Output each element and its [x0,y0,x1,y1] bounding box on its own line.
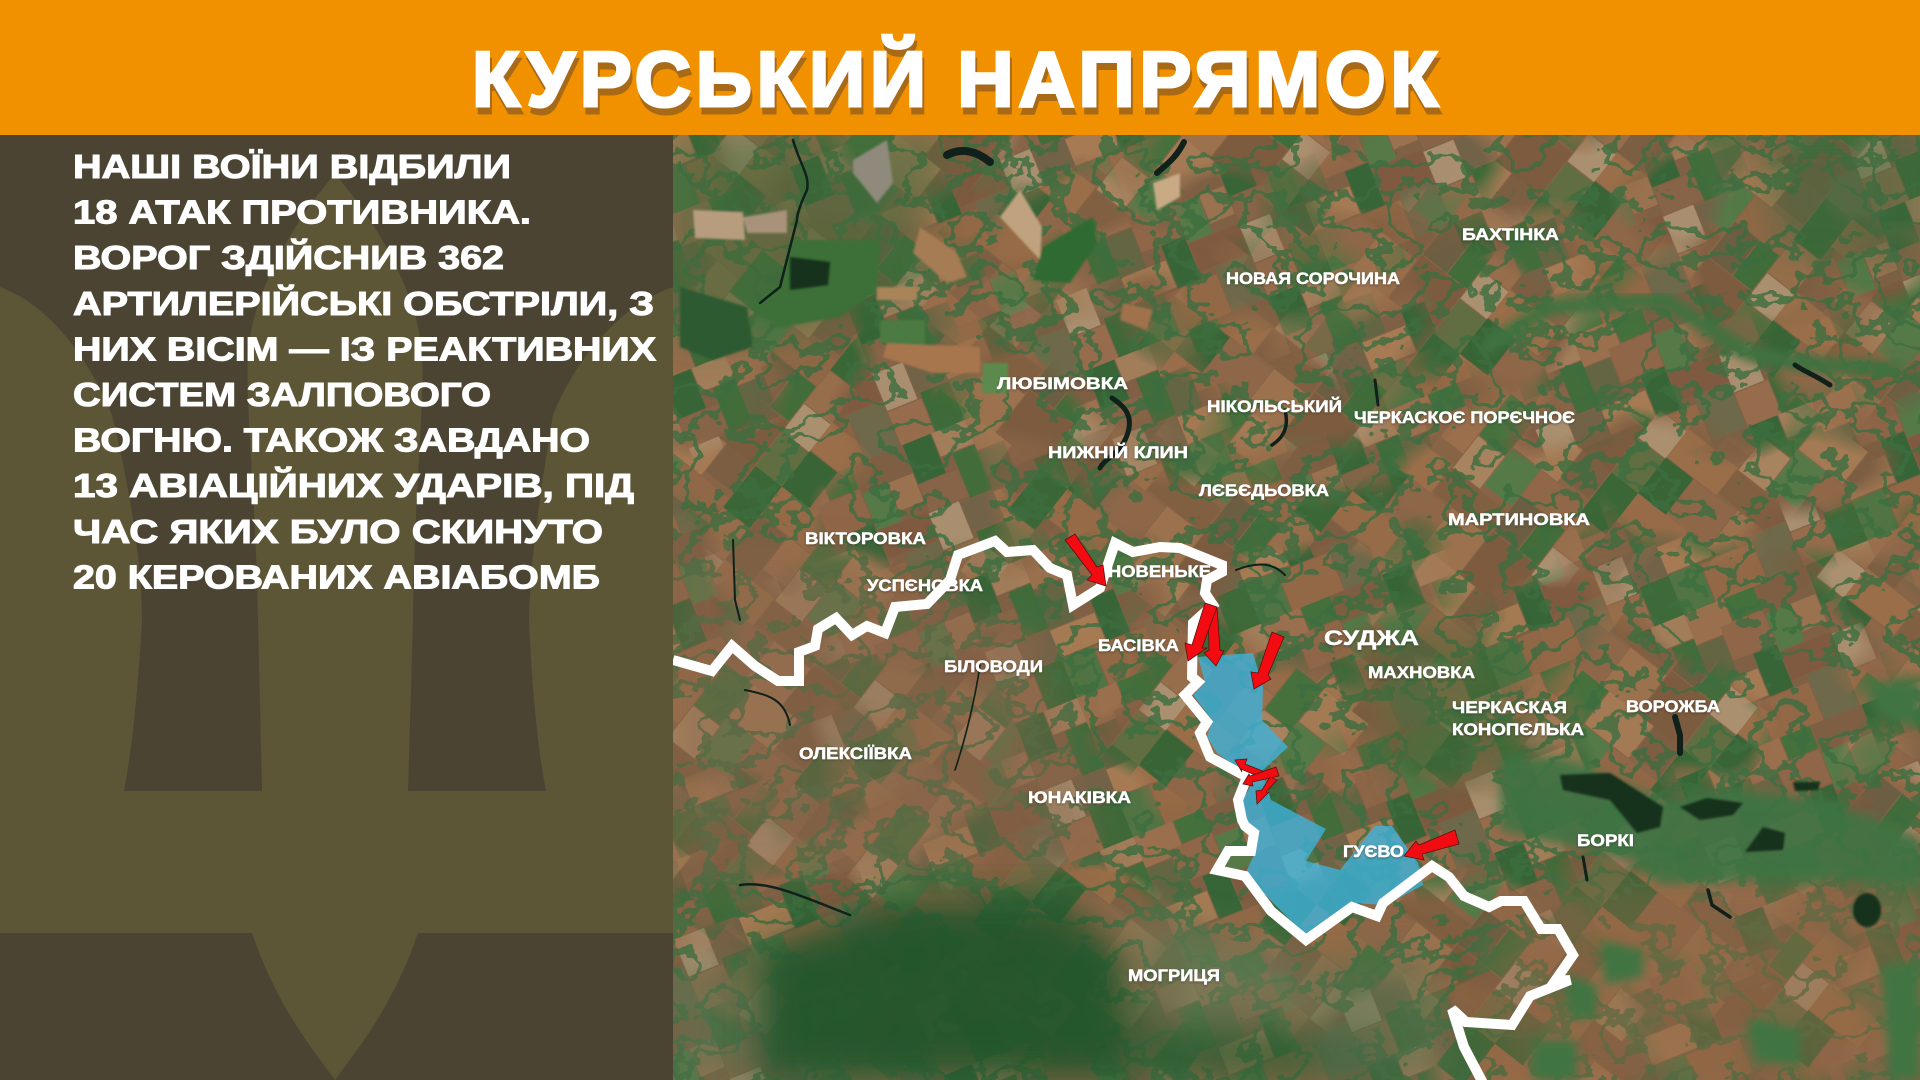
settlement labels on the map: ЧЕРКАСКАЯ [1452,699,1567,717]
trident emblem [0,174,673,1080]
settlement labels on the map: КОНОПЄЛЬКА [1452,721,1584,739]
summary text block: АРТИЛЕРІЙСЬКІ ОБСТРІЛИ, З [73,284,654,323]
arrow: west of Basivka [1204,606,1224,666]
arrow: toward Guevo [1404,830,1459,860]
summary text block: НАШІ ВОЇНИ ВІДБИЛИ [73,149,511,186]
settlement labels on the map: МОГРИЦЯ [1128,967,1220,985]
arrow: central cross pointing west [1243,767,1279,786]
summary text block: 20 КЕРОВАНИХ АВІАБОМБ [73,559,600,596]
settlement labels on the map: ЛЮБІМОВКА [997,375,1128,393]
title: КУРСЬКИЙ НАПРЯМОК [472,35,1438,123]
summary text block: СИСТЕМ ЗАЛПОВОГО [73,377,491,414]
settlement labels on the map: УСПЄНОВКА [867,577,983,595]
forest mass at bottom [760,900,1470,1080]
dark woods [790,257,1881,927]
front line: white border [673,541,1573,1080]
hand-placed fields upper left [680,140,1180,393]
streams and reservoirs [733,140,1830,917]
summary text block: 13 АВІАЦІЙНИХ УДАРІВ, ПІД [73,466,634,505]
arrow: east of occupied zone [1251,632,1284,689]
settlement labels on the map: ВОРОЖБА [1626,698,1720,716]
settlement labels on the map: НОВЕНЬКЕ [1108,563,1211,581]
summary text block: 18 АТАК ПРОТИВНИКА. [73,195,531,232]
satellite map background [673,135,1920,1080]
arrow: central cross pointing north-west [1235,759,1265,778]
settlement labels on the map: НІКОЛЬСЬКИЙ [1207,397,1342,416]
occupied area: blue zone [1193,653,1423,935]
settlement labels on the map: НИЖНІЙ КЛИН [1048,443,1188,462]
river valley woodland [1500,680,1920,1080]
summary text block: НИХ ВІСІМ — ІЗ РЕАКТИВНИХ [73,331,657,368]
settlement labels on the map: МАХНОВКА [1368,664,1475,682]
settlement labels on the map: ОЛЕКСІЇВКА [799,745,912,763]
summary text block: ЧАС ЯКИХ БУЛО СКИНУТО [73,514,603,551]
settlement labels on the map: БІЛОВОДИ [944,658,1043,676]
header bar [0,0,1920,135]
settlement labels on the map: МАРТИНОВКА [1448,511,1590,529]
arrow: north of Novenke [1065,534,1106,586]
summary text block: ВОГНЮ. ТАКОЖ ЗАВДАНО [73,423,590,460]
green valley through upper right [1482,300,1900,370]
settlement labels on the map: БОРКІ [1577,832,1634,850]
settlement labels on the map: ГУЄВО [1343,843,1404,861]
settlement labels on the map: БАСІВКА [1098,637,1179,655]
left panel [0,135,673,1080]
settlement labels on the map: БАХТІНКА [1462,226,1559,244]
summary text block: ВОРОГ ЗДІЙСНИВ 362 [73,238,504,277]
settlement labels on the map: СУДЖА [1324,627,1419,650]
settlement labels on the map: ЮНАКІВКА [1028,789,1131,807]
settlement labels on the map: ЛЄБЄДЬОВКА [1199,482,1329,500]
settlement labels on the map: ЧЕРКАСКОЄ ПОРЄЧНОЄ [1354,409,1575,427]
arrow: east of Basivka [1185,603,1217,661]
summary text block [73,149,657,596]
settlement labels on the map [799,226,1720,985]
arrow: central cross pointing south [1256,777,1277,804]
settlement labels on the map: НОВАЯ СОРОЧИНА [1226,270,1400,288]
attack arrows [1065,534,1459,860]
settlement labels on the map: ВІКТОРОВКА [805,530,926,548]
